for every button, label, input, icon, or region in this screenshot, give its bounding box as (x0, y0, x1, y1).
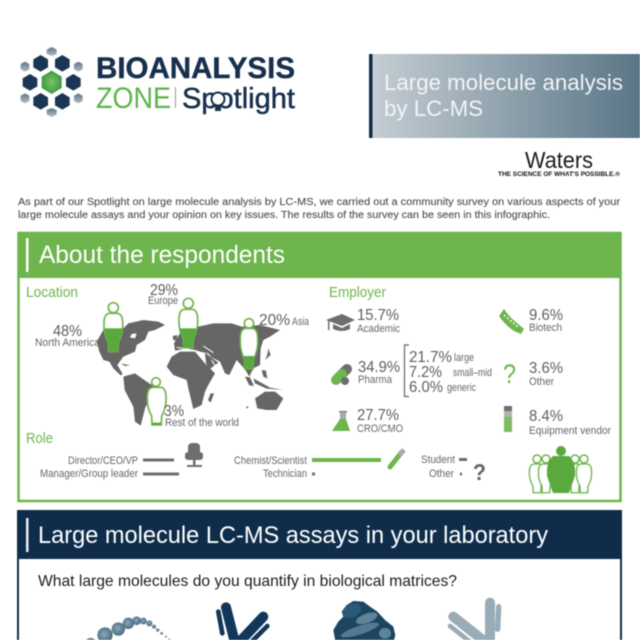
employer: Equipment vendor 8.4% (529, 408, 611, 437)
world map (97, 320, 283, 426)
logo word: ZONE: ZONE (96, 82, 171, 115)
banner title line 1: Large molecule analysis (384, 70, 623, 95)
molecule: protein blob (333, 600, 395, 640)
employer: Academic 15.7%: Academic (357, 323, 400, 335)
label: Rest of the world 3%: Rest of the world (165, 417, 239, 429)
employer: Biotech 9.6%: 9.6% (529, 307, 563, 324)
employer: Other 3.6% (529, 360, 563, 388)
subheading: employer: Employer (329, 284, 386, 301)
label: North America 48%: 48% (53, 323, 82, 340)
heading: large molecule LC-MS assays: Large molecule LC-MS assays in your laboratory (38, 522, 548, 549)
figure: Rest of the world 3% (147, 378, 166, 425)
label: Rest of the world 3%: 3% (164, 403, 184, 420)
intro text: As part of our Spotlight on large molecule analysis by LC-MS, we carried out a community survey on various aspects of your (18, 197, 621, 208)
sponsor logo: Waters (498, 147, 621, 178)
employer: Equipment vendor 8.4%: Equipment vendor (529, 425, 611, 437)
role: Manager/Group leader: Manager/Group leader (40, 468, 138, 480)
intro text (18, 197, 621, 221)
sponsor logo: Waters: Waters (525, 147, 593, 173)
logo word: Spotlight: Spotlight (182, 83, 295, 115)
icon: question mark: ? (473, 459, 486, 485)
icon: graduation cap (326, 314, 355, 331)
employer: CRO/CMO 27.7%: CRO/CMO (357, 423, 403, 435)
subheading: role: Role (26, 430, 53, 447)
employer: Other 3.6%: 3.6% (529, 360, 563, 377)
heading: about the respondents: About the respondents (39, 241, 285, 269)
employer: CRO/CMO 27.7%: 27.7% (357, 407, 399, 424)
intro text: large molecule assays and your opinion on key issues. The results of the survey can be seen in this infographic. (18, 210, 550, 221)
map: Americas (97, 320, 165, 426)
banner: Large molecule analysis by LC-MS (369, 54, 640, 138)
figure: North America 48% (104, 303, 123, 352)
role: Chemist/Scientist (234, 455, 381, 467)
figure: Asia 20% (240, 319, 258, 369)
label: North America 48% (35, 323, 101, 349)
sponsor tagline: THE SCIENCE OF WHAT'S POSSIBLE.® (498, 171, 621, 178)
label: Europe 29%: Europe (148, 295, 178, 307)
icon: hexagon cluster (21, 47, 83, 117)
label: Asia 20%: 20% (259, 312, 290, 329)
icon: test tube (390, 450, 404, 467)
pharma breakdown (404, 345, 492, 396)
label: Europe 29%: 29% (150, 282, 178, 299)
role: Student: Student (421, 454, 455, 466)
employer: Pharma 34.9%: Pharma (358, 374, 393, 386)
panel: large molecule LC-MS assays (17, 510, 622, 640)
pharma breakdown: large (454, 352, 474, 364)
pharma breakdown: generic (447, 382, 476, 394)
icon: flask (332, 411, 350, 431)
icon: vial (504, 406, 512, 432)
icon: office chair (185, 443, 203, 467)
role: Technician: Technician (263, 468, 307, 480)
employer: Biotech 9.6% (529, 307, 563, 334)
molecule: grey antibody (450, 603, 499, 640)
map: Eurasia, Africa and Oceania (167, 323, 283, 410)
employer: Biotech 9.6%: Biotech (529, 322, 562, 334)
pharma breakdown: 6.0% (409, 379, 443, 396)
question: what large molecules: What large molecules do you quantify in biological matrices? (38, 573, 457, 590)
label: Rest of the world 3% (164, 403, 239, 429)
panel: about the respondents (18, 232, 621, 501)
employer: Academic 15.7%: 15.7% (357, 307, 399, 324)
employer: Pharma 34.9%: 34.9% (358, 359, 400, 376)
subheading: location: Location (26, 284, 78, 301)
label: Asia 20% (259, 312, 310, 329)
logo: Bioanalysis Zone Spotlight (21, 47, 295, 117)
molecule: peptide chain (85, 616, 170, 640)
employer: Pharma 34.9% (358, 359, 400, 386)
icon: green question mark: ? (503, 359, 516, 389)
label: Asia 20%: Asia (292, 316, 310, 328)
figure: Europe 29% (179, 298, 198, 348)
icon: pills (336, 369, 349, 385)
employer: Equipment vendor 8.4%: 8.4% (529, 408, 563, 425)
role: Other: Other (429, 468, 454, 480)
pharma breakdown: 21.7% (409, 349, 452, 366)
employer: Other 3.6%: Other (529, 376, 554, 388)
logo word: BIOANALYSIS: BIOANALYSIS (96, 52, 295, 85)
logo divider (175, 87, 176, 108)
icon: DNA helix (499, 309, 524, 334)
employer: CRO/CMO 27.7% (357, 407, 403, 435)
icon: crowd of people (529, 446, 592, 493)
role: Chemist/Scientist: Chemist/Scientist (234, 455, 307, 467)
icon: light bulb (212, 92, 224, 111)
label: North America 48%: North America (35, 337, 101, 349)
pharma breakdown: small–mid (453, 367, 492, 379)
molecule: navy antibody (218, 607, 267, 640)
employer: Academic 15.7% (357, 307, 400, 335)
pharma breakdown: 7.2% (409, 364, 442, 381)
label: Europe 29% (148, 282, 178, 307)
role: Director/CEO/VP: Director/CEO/VP (68, 455, 138, 467)
banner title line 2: by LC-MS (384, 96, 483, 121)
